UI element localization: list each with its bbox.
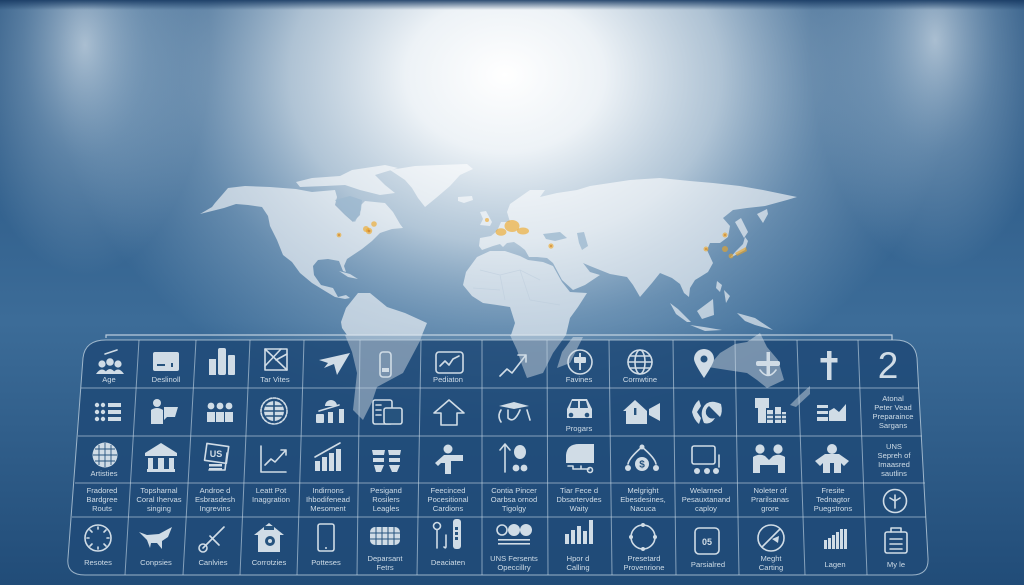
- cell: Artisties: [90, 442, 118, 478]
- label: Contia Pincer: Tigolgy: [502, 504, 526, 513]
- cell: anchor: [756, 352, 780, 376]
- cell: Hpor d Calling: Hpor d: [567, 554, 589, 563]
- cell: Presetard Provenrione: Presetard: [628, 554, 660, 563]
- cell: UNS text: UNS: [886, 442, 902, 451]
- land seen through the table: [345, 333, 810, 420]
- cell: Deparsant Fetrs: Fetrs: [376, 563, 394, 572]
- icon: circled clock: [884, 490, 906, 512]
- label: Contia Pincer: Contia Pincer: [491, 486, 537, 495]
- label: Melgright: Ebesdesines,: [620, 495, 666, 504]
- cell: Canlvies: Canlvies: [198, 558, 228, 567]
- icon table panel: [68, 333, 928, 575]
- grid lines: [68, 340, 928, 575]
- cell: Conpsies: Conpsies: [140, 558, 172, 567]
- label: Leatt Pot: [252, 486, 290, 504]
- Japan: [730, 237, 748, 258]
- cell: Atonal text: Peter Vead: [874, 403, 912, 412]
- cell: Parsialred: Parsialred: [691, 560, 725, 569]
- Caspian and Black seas: [335, 196, 588, 250]
- cell: UNS Fersents: UNS Fersents: [490, 554, 538, 563]
- cell: presenter: [151, 399, 178, 424]
- cell: Meght Carting: [758, 525, 784, 572]
- cell: Canlvies: [198, 527, 228, 567]
- cell: Atonal text: Sargans: [879, 421, 907, 430]
- label: Topsharnal: [136, 486, 182, 513]
- label: Androe: Androe d: [200, 486, 230, 495]
- label: Pesigand: Pesigand: [370, 486, 402, 495]
- cell: gear globe: [261, 398, 287, 424]
- cell: cloche with bars: [316, 400, 344, 423]
- cell: graduation: [499, 402, 530, 422]
- cell: Progars: [566, 399, 592, 433]
- cell: My le: My le: [887, 560, 905, 569]
- label: Topsharnal: Topsharnal: [140, 486, 178, 495]
- cell: Hpor d Calling: Calling: [566, 563, 590, 572]
- cell: battery: [380, 352, 391, 377]
- cell: Corrotzies: [252, 523, 287, 567]
- cell: Cornwtine: Cornwtine: [623, 375, 657, 384]
- cell: Deaciaten: [431, 519, 465, 567]
- Cuba: [339, 271, 358, 279]
- label: Feecinced: Feecinced: [430, 486, 466, 495]
- label: Noleter: grore: [761, 504, 779, 513]
- cell: Tar Vites: [260, 349, 290, 384]
- cell: house camera: [623, 400, 660, 424]
- cell: Pediaton: Pediaton: [433, 375, 463, 384]
- cell: Hpor d Calling: [565, 520, 593, 572]
- label: Fradored: Bardgree: [86, 495, 118, 504]
- world map: [200, 164, 797, 335]
- label: Indirnons: [306, 486, 350, 513]
- label: Tiar Fece: [556, 486, 602, 513]
- cell: Conpsies: [139, 527, 172, 567]
- cell: UNS text: Sepreh of: [878, 451, 911, 460]
- label: Contia Pincer: [491, 486, 537, 513]
- cell: Resotes: Resotes: [84, 558, 112, 567]
- UK: [480, 211, 492, 226]
- cell: two people at a desk: [753, 444, 785, 473]
- cell: Lagen: Lagen: [824, 560, 846, 569]
- orange hotspots: [337, 218, 747, 258]
- label: Indirnons: Indirnons: [312, 486, 344, 495]
- cell: money network: $: [639, 460, 645, 470]
- cell: bank: [145, 443, 177, 472]
- cell: Favines: Favines: [566, 375, 592, 384]
- cell: US document: [205, 443, 229, 470]
- cell: Potteses: Potteses: [311, 558, 341, 567]
- label: Indirnons: Mesoment: [310, 504, 347, 513]
- label: Androe: [195, 486, 235, 513]
- North America: [200, 186, 403, 299]
- row 5: [84, 519, 907, 572]
- Arctic islands: [296, 165, 398, 195]
- label: Leatt Pot: Leatt Pot: [256, 486, 287, 495]
- cell: map pin: [694, 349, 714, 378]
- label: Welarned: Pesauxtanand: [682, 495, 730, 504]
- label: Feecinced: [428, 486, 469, 513]
- label: Tiar Fece: Dbsartervdes: [556, 495, 602, 504]
- Iceland: [458, 196, 473, 203]
- label: Androe: Ingrevins: [200, 504, 231, 513]
- cell: board with dots: [692, 446, 719, 474]
- label: Melgright: [620, 486, 666, 513]
- cell: Presetard Provenrione: [624, 523, 664, 572]
- label: Contia Pincer: Oarbsa ornod: [491, 495, 537, 504]
- label: Pesigand: [370, 486, 402, 513]
- cell: Deparsant Fetrs: [367, 527, 403, 572]
- table frame top line: [106, 335, 892, 340]
- cell: UNS Fersents: Opeccillry: [497, 563, 531, 572]
- cell: person with arms out: [815, 444, 849, 473]
- label: Androe: Esbrasdesh: [195, 495, 235, 504]
- cell: Meght Carting: Carting: [759, 563, 783, 572]
- cell: Presetard Provenrione: Provenrione: [624, 563, 664, 572]
- label: Welarned: caploy: [695, 504, 717, 513]
- label: Feecinced: Pocesitional: [428, 495, 469, 504]
- cell: building bars: [209, 348, 235, 375]
- Kamchatka and Sakhalin: [735, 209, 768, 238]
- cell: Lagen: [824, 529, 847, 569]
- cell: Tar Vites: Tar Vites: [260, 375, 290, 384]
- cell: Deslinoll: [152, 352, 181, 384]
- label: Fradored: [86, 486, 118, 513]
- label: Welarned: [682, 486, 730, 513]
- cell: house arrow: [434, 400, 464, 425]
- South America (above table): [341, 293, 427, 335]
- cell: numeral 2: 2: [878, 345, 898, 386]
- cell: line chart: [261, 446, 286, 472]
- label: Fresite: Puegstrons: [814, 504, 852, 513]
- cell: UNS Fersents: [490, 524, 538, 572]
- label: Topsharnal: singing: [147, 504, 171, 513]
- cell: UNS text: [878, 442, 911, 478]
- cell: Meght Carting: Meght: [760, 554, 782, 563]
- cell: chart panel: [817, 404, 846, 421]
- cell: Deaciaten: Deaciaten: [431, 558, 465, 567]
- cell: cross: [820, 351, 838, 380]
- cell: person pointing: [435, 444, 463, 474]
- cell: machine: [566, 444, 594, 472]
- label: Fresite: [814, 486, 852, 513]
- cell: My le: [885, 528, 907, 569]
- cell: Atonal text: Preparaince: [873, 412, 913, 421]
- label: Pesigand: Rosilers: [372, 495, 400, 504]
- cell: Cornwtine: [623, 350, 657, 384]
- cell: Potteses: [311, 524, 341, 567]
- label: Noleter: Prarilsanas: [751, 495, 789, 504]
- Africa borders: [473, 270, 560, 305]
- cell: Atonal text: Atonal: [882, 394, 904, 403]
- cell: Deslinoll: Deslinoll: [152, 375, 181, 384]
- label: Melgright: Nacuca: [630, 504, 657, 513]
- label: Melgright: Melgright: [627, 486, 660, 495]
- cell: Progars: Progars: [566, 424, 592, 433]
- cell: UNS text: Imaasred: [878, 460, 910, 469]
- cell: C globe: [692, 400, 722, 424]
- table body: [68, 340, 928, 575]
- label: Pesigand: Leagles: [373, 504, 399, 513]
- cell: Resotes: [84, 525, 112, 567]
- cell: list: [95, 403, 121, 421]
- cell: paper plane: [319, 353, 350, 375]
- label: Fradored: Fradored: [87, 486, 117, 495]
- cell: stacked layers: [372, 450, 401, 472]
- label: Fresite: Fresite: [821, 486, 845, 495]
- row 4: text row: [86, 486, 906, 513]
- label: Fradored: Routs: [92, 504, 112, 513]
- cell: Favines: [566, 350, 592, 384]
- cell: rising bars: [315, 443, 341, 471]
- row 3: [90, 442, 911, 478]
- label: Tiar Fece: Tiar Fece d: [560, 486, 598, 495]
- cell: Age: [96, 350, 124, 384]
- cell: US document: US: [210, 449, 222, 459]
- cell: three people: [207, 403, 233, 422]
- cell: Corrotzies: Corrotzies: [252, 558, 287, 567]
- label: Topsharnal: Coral Ihervas: [136, 495, 182, 504]
- cell: devices: [373, 400, 402, 424]
- label: Noleter: [751, 486, 789, 513]
- Southeast Asia islands: [670, 281, 773, 331]
- Greenland: [390, 164, 473, 207]
- cell: rising arrow: [500, 355, 526, 376]
- row 1: [96, 345, 898, 386]
- label: Indirnons: Ihbodifenead: [306, 495, 350, 504]
- cell: buildings: [755, 398, 786, 423]
- cell: Parsialred: [691, 528, 725, 569]
- label: Feecinced: Cardions: [433, 504, 463, 513]
- Eurasia: [479, 178, 797, 297]
- cell: arrow and chain: [500, 444, 527, 472]
- cell: Pediaton: [433, 352, 463, 384]
- cell: Artisties: Artisties: [90, 469, 118, 478]
- cell: Atonal text: [873, 394, 913, 430]
- cell: Deparsant Fetrs: Deparsant: [367, 554, 403, 563]
- row 2: [95, 394, 913, 433]
- Africa (above table): [463, 251, 587, 335]
- cell: money network: [625, 444, 659, 471]
- cell: Parsialred: 05: [702, 537, 712, 547]
- label: Welarned: Welarned: [690, 486, 722, 495]
- label: Leatt Pot: Inaggration: [252, 495, 290, 504]
- cell: Age: Age: [102, 375, 116, 384]
- label: Fresite: Tednagtor: [816, 495, 850, 504]
- label: Tiar Fece: Waity: [570, 504, 589, 513]
- label: Noleter: Noleter of: [754, 486, 787, 495]
- cell: UNS text: sautlins: [881, 469, 907, 478]
